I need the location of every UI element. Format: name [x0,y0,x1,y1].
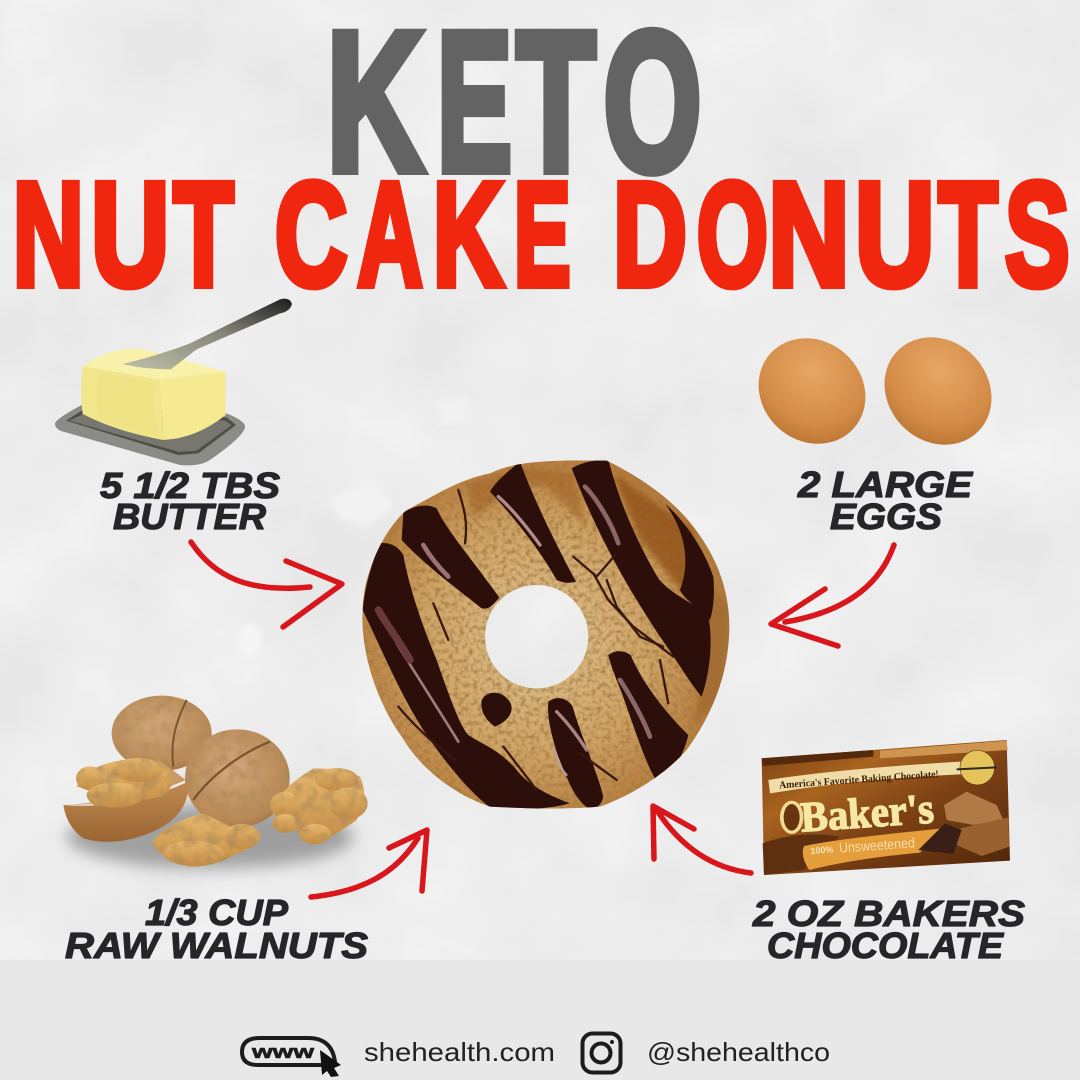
heading: NUT CAKE DONUTS: O [697,153,768,317]
heading: NUT CAKE DONUTS: N [768,153,849,317]
thin chocolate lines [398,490,673,790]
icon: chocolate box: Unsweetened [838,834,915,856]
footer [242,1034,830,1077]
icon: eggs [737,315,1014,467]
website: shehealth.com [364,1037,555,1067]
label: 1/3 CUP RAW WALNUTS [65,892,368,966]
arrow: chocolate to donut [653,806,751,873]
label: 1/3 CUP RAW WALNUTS: 1/3 CUP [145,892,289,933]
icon: walnut kernel right [270,768,368,844]
icon: walnut kernel front [152,813,260,867]
heading: NUT CAKE DONUTS: N [13,153,84,317]
ingredient: butter [55,299,342,627]
heading: NUT CAKE DONUTS: T [174,153,234,317]
ingredient: baker's chocolate [653,740,1025,966]
label: 2 OZ BAKERS CHOCOLATE: 2 OZ BAKERS [752,893,1025,934]
arrow: eggs to donut [771,545,894,646]
heading: NUT CAKE DONUTS: C [275,153,347,317]
label: 2 OZ BAKERS CHOCOLATE [752,893,1025,966]
title [13,0,1069,317]
icon: walnuts [63,696,368,868]
instagram handle: @shehealthco [647,1037,830,1067]
icon: chocolate box [762,740,1010,875]
icon: walnut kernel in shell [76,758,173,808]
arrow: walnuts to donut [311,830,427,897]
label: 2 LARGE EGGS: 2 LARGE [797,464,973,505]
donut illustration [353,453,737,817]
icon: www cursor: www [251,1042,315,1062]
icon: chocolate box: 100% [810,844,834,856]
label: 2 LARGE EGGS [797,464,973,537]
label: 5 1/2 TBS BUTTER [100,465,280,537]
heading: NUT CAKE DONUTS: K [433,153,503,317]
ingredient: walnuts [63,696,427,966]
shape: cake ring [353,453,737,817]
box text: America's Favorite Baking Chocolate! [779,769,939,791]
heading: NUT CAKE DONUTS: D [613,153,687,317]
icon: instagram [582,1034,620,1072]
heading: NUT CAKE DONUTS: T [939,153,998,317]
icon: chocolate box: Baker's [799,785,935,842]
label: 2 OZ BAKERS CHOCOLATE: CHOCOLATE [767,925,1004,966]
chocolate highlights [378,487,650,775]
ingredient: eggs [737,315,1014,646]
heading: NUT CAKE DONUTS: E [514,153,571,317]
label: 1/3 CUP RAW WALNUTS: RAW WALNUTS [65,925,368,966]
arrow: butter to donut [191,542,342,627]
chocolate drizzle [363,460,714,809]
label: 5 1/2 TBS BUTTER: BUTTER [113,496,266,537]
icon: butter on tray [55,299,292,465]
heading: NUT CAKE DONUTS: U [855,153,934,317]
heading: NUT CAKE DONUTS: U [91,153,169,317]
label: 5 1/2 TBS BUTTER: 5 1/2 TBS [100,465,280,506]
heading: NUT CAKE DONUTS: A [358,153,422,317]
icon: knife [123,299,292,369]
icon: www cursor [242,1038,341,1077]
label: 2 LARGE EGGS: EGGS [830,496,942,537]
